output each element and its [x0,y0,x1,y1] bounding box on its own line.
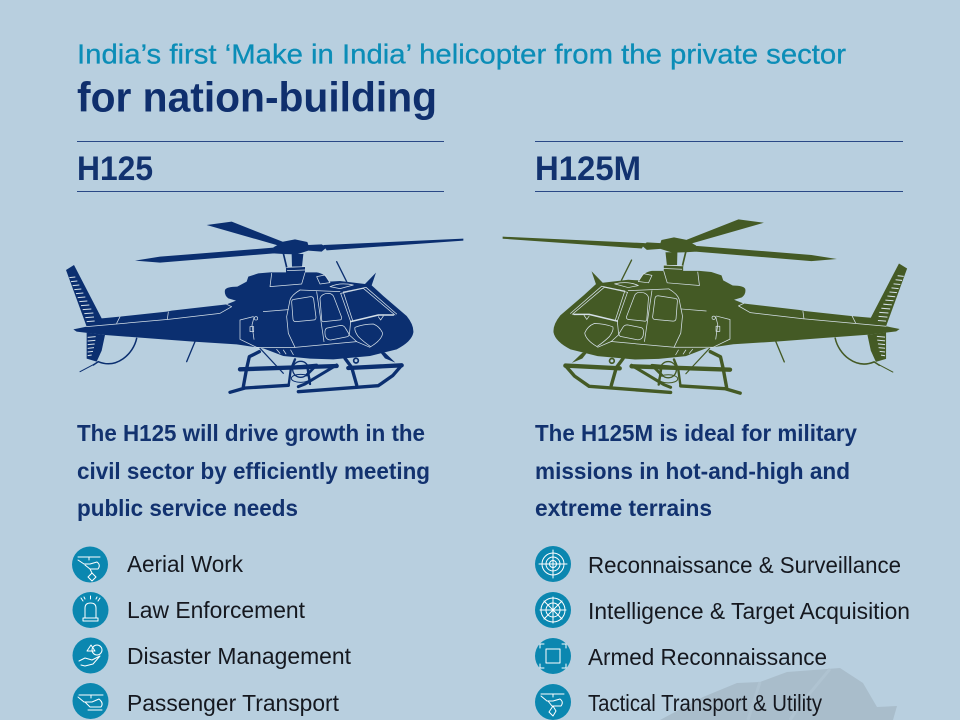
illustration: H125 civil helicopter [66,222,463,392]
label: reconnaissance and surveillance: Reconnaissance & Surveillance [588,552,901,578]
label: aerial work: Aerial Work [127,551,243,577]
icon: armed reconnaissance frame [535,638,571,674]
text block: H125M description: The H125M is ideal for military [535,420,857,446]
icon: disaster management [72,638,108,674]
list: H125M roles [535,546,910,720]
text block: H125 description: public service needs [77,495,298,521]
text block: H125M description [535,420,857,521]
list: H125 roles [72,546,352,719]
text block: H125 description: The H125 will drive growth in the [77,420,425,446]
label: passenger transport: Passenger Transport [127,690,340,716]
text block: H125M description: missions in hot-and-high and [535,458,850,484]
title [77,38,846,120]
text block: H125M description: extreme terrains [535,495,712,521]
label: disaster management: Disaster Management [127,643,352,669]
illustration: H125M military helicopter [503,219,907,393]
title: for nation-building [77,74,437,120]
title: India’s first ‘Make in India’ helicopter from the private sector [77,38,846,70]
label: tactical transport and utility: Tactical Transport & Utility [588,690,822,716]
icon: passenger transport [72,683,108,719]
label: armed reconnaissance: Armed Reconnaissance [588,644,827,670]
icon: radar [535,592,571,628]
icon: tactical transport [535,684,571,720]
text block: H125 description: civil sector by efficiently meeting [77,458,430,484]
text block: H125 description [77,420,430,521]
panel heading: H125: H125 [77,150,153,188]
icon: law enforcement siren [72,592,108,628]
label: intelligence and target acquisition: Intelligence & Target Acquisition [588,598,910,624]
icon: aerial work [72,546,108,582]
icon: reconnaissance target [535,546,571,582]
mountain backdrop [660,668,897,720]
panel heading: H125M: H125M [535,150,641,188]
label: law enforcement: Law Enforcement [127,597,306,623]
